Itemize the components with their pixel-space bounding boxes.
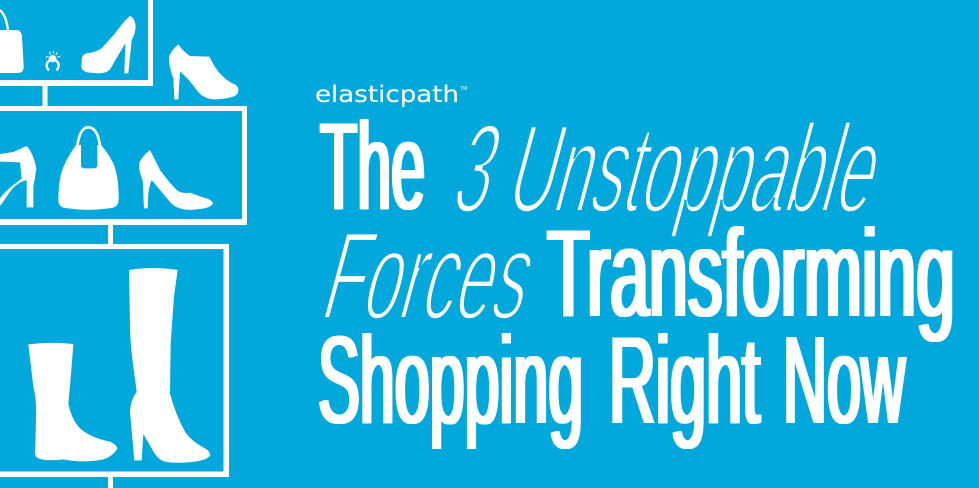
icon: strappy heel cropped (0, 146, 36, 207)
title word: Now: Now (783, 312, 905, 450)
icon: knee-high boot (129, 268, 210, 463)
icon: ankle boot (28, 343, 117, 461)
shelving frame lines (0, 0, 247, 488)
logo: elasticpath: TM (460, 86, 467, 92)
panel: top shelf items (0, 10, 238, 99)
icon: high heel pump (81, 16, 136, 73)
title word: Shopping: Shopping (318, 312, 583, 450)
panel: middle shelf items (0, 127, 213, 210)
title light italic words: Forces (311, 204, 551, 346)
icon: stiletto pump (139, 150, 213, 210)
icon: ankle bootie (169, 44, 238, 99)
title word: The: The (320, 98, 425, 236)
title light italic words: 3 Unstoppable (442, 98, 898, 239)
title word: Transforming: Transforming (547, 205, 955, 343)
panel: bottom shelf boots (28, 268, 210, 463)
icon: hobo handbag (58, 127, 119, 210)
logo: elasticpath: elasticpath (315, 82, 459, 108)
icon: ring (46, 51, 60, 70)
icon: handbag cropped (0, 10, 24, 73)
title word: Right: Right (609, 312, 760, 450)
